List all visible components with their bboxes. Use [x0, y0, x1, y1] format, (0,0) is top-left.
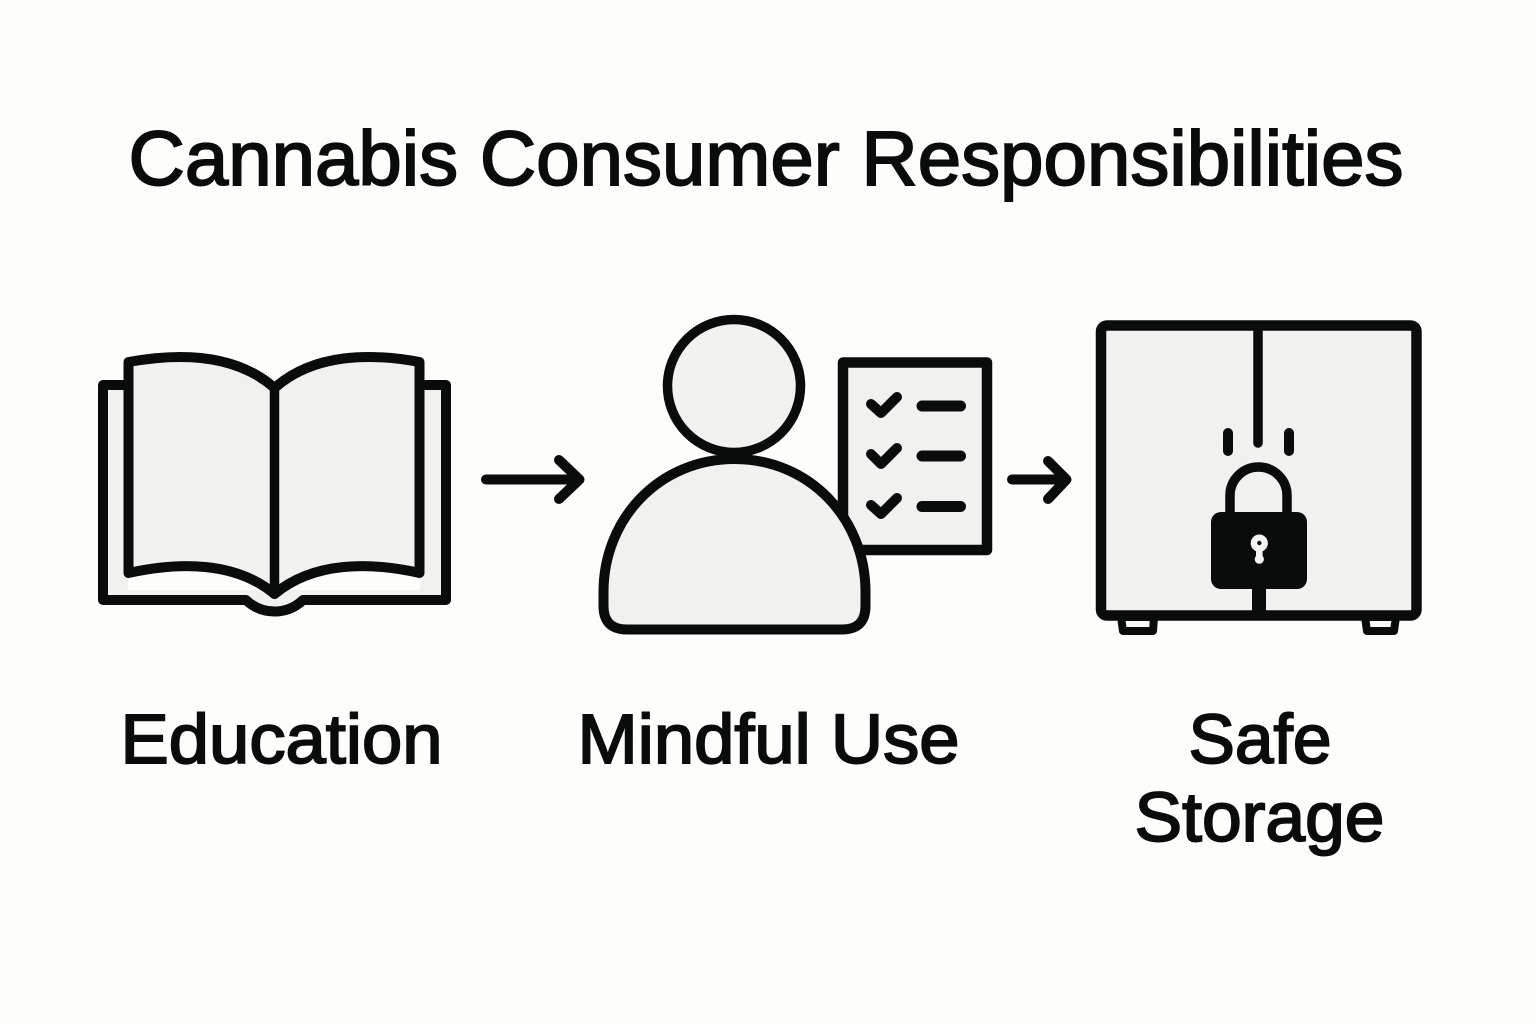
- lock stem: [1252, 585, 1266, 612]
- arrow: mindful use to safe storage: [1012, 461, 1066, 499]
- cabinet body: [1101, 326, 1416, 616]
- padlock shackle: [1230, 467, 1287, 516]
- icon: person with checklist: [604, 320, 987, 630]
- keyhole: [1251, 534, 1268, 564]
- centre divider: [1253, 328, 1263, 443]
- arrow: education to mindful use: [486, 460, 580, 499]
- padlock body: [1211, 512, 1307, 589]
- book spine: [270, 389, 279, 594]
- cabinet feet: [1121, 617, 1396, 631]
- label: mindful use: Mindful Use: [578, 700, 960, 778]
- person head: [668, 320, 800, 452]
- label: safe storage: Storage: [1134, 778, 1384, 856]
- person body: [604, 459, 866, 630]
- checklist: [843, 362, 987, 550]
- icon: open book: [103, 357, 446, 612]
- label: safe storage: [1134, 700, 1384, 856]
- latch marks: [1228, 433, 1289, 451]
- label: education: Education: [120, 700, 442, 778]
- icon: locked cabinet: [1101, 326, 1416, 631]
- book cover outline: [103, 385, 446, 612]
- title: Cannabis Consumer Responsibilities: [128, 116, 1404, 202]
- label: safe storage: Safe: [1188, 700, 1332, 778]
- book pages: [128, 357, 420, 594]
- book cover: [103, 385, 446, 612]
